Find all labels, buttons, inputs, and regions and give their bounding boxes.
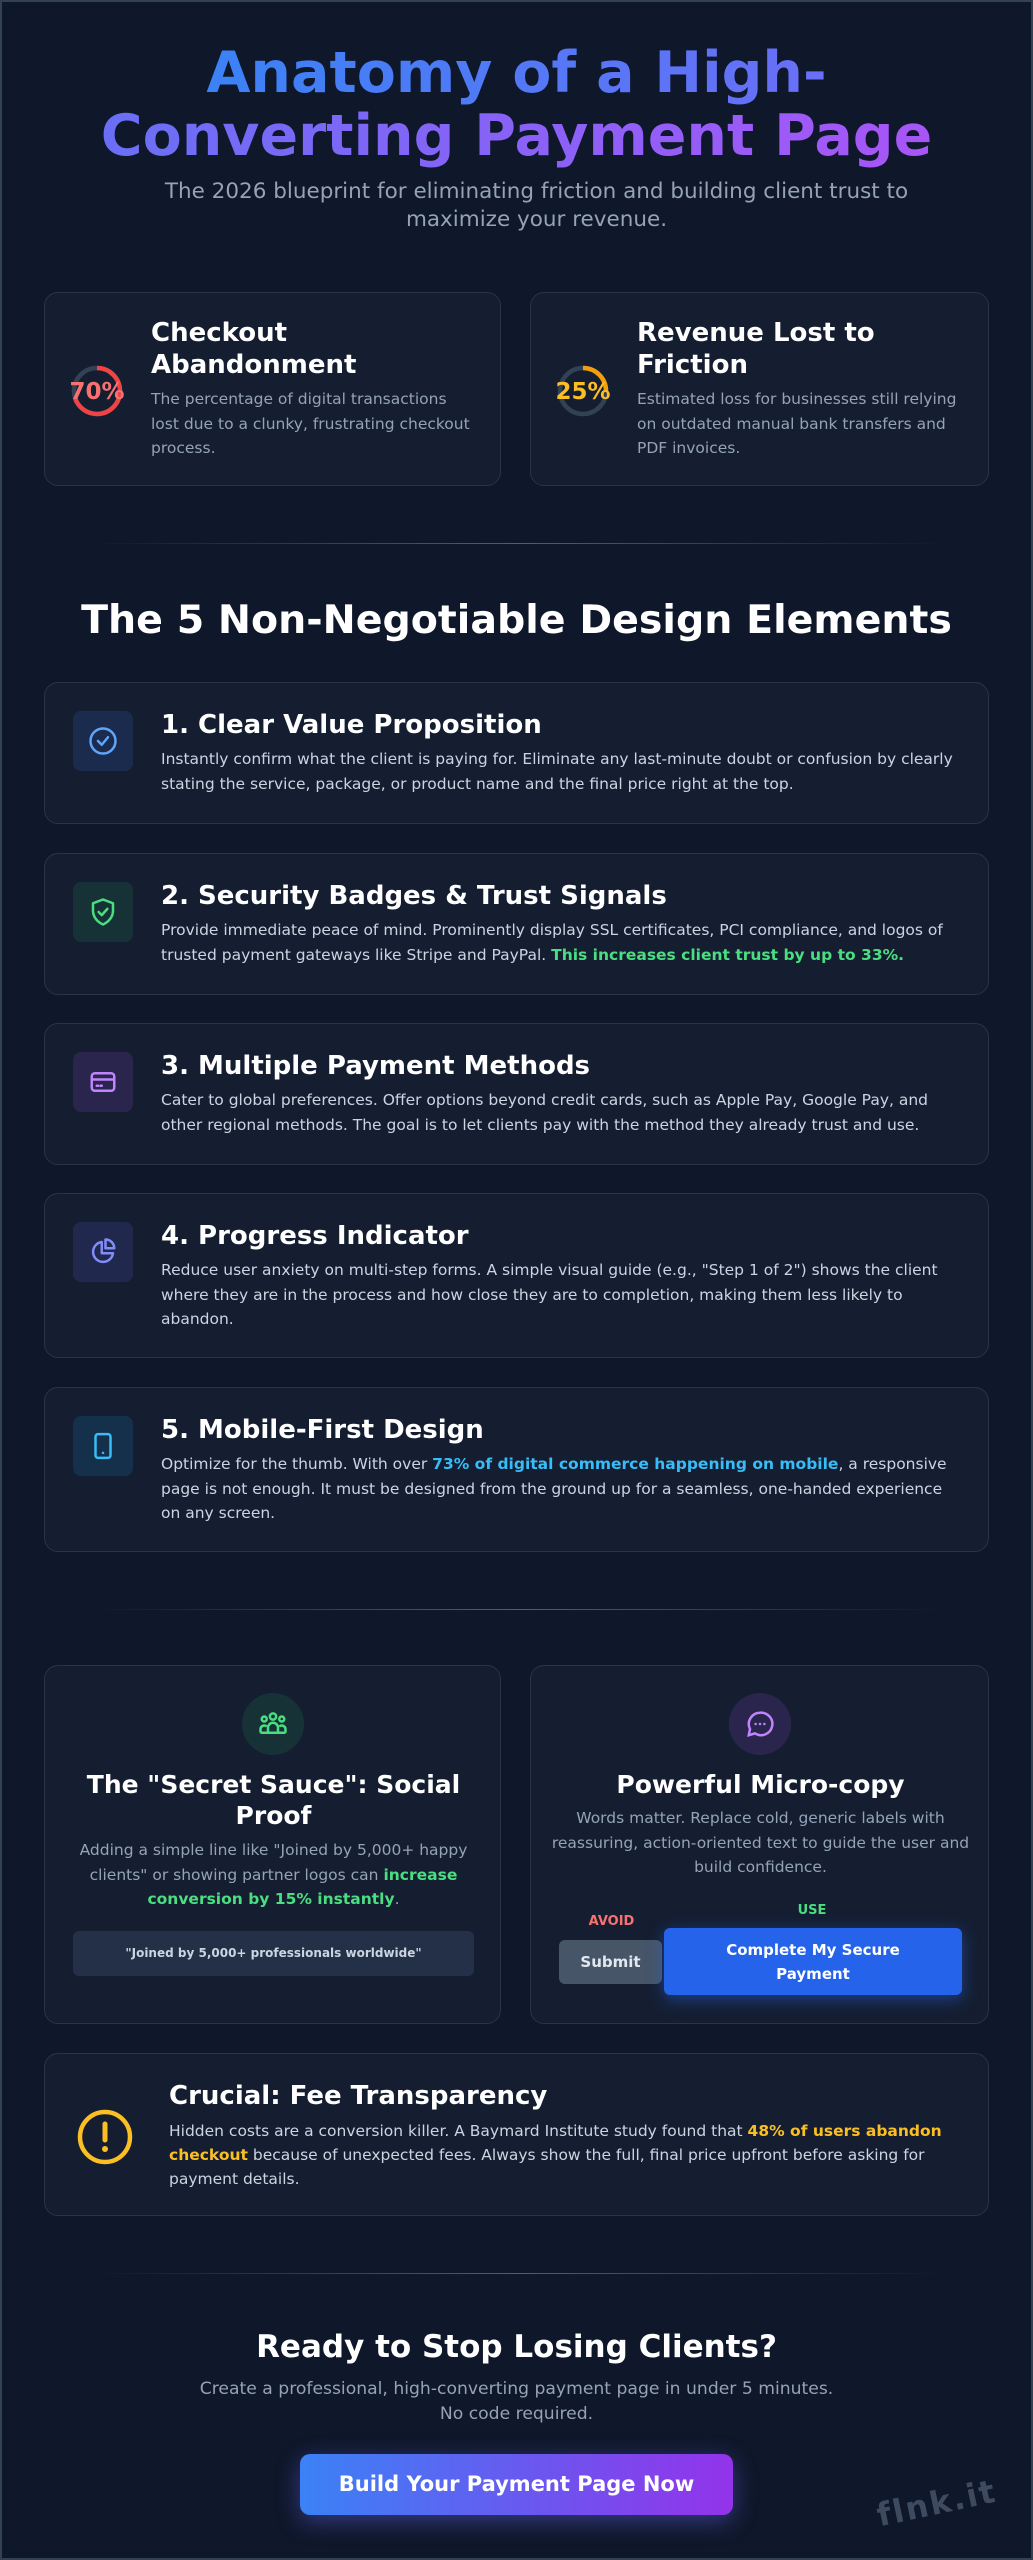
- title: Converting Payment Page: [101, 103, 932, 169]
- example badge: [73, 1931, 474, 1976]
- watermark: flnk.it: [873, 2472, 1000, 2534]
- icon: users: [242, 1693, 304, 1755]
- example badge: "Joined by 5,000+ professionals worldwide": [125, 1946, 422, 1960]
- element card 3: [44, 1023, 989, 1165]
- description: Provide immediate peace of mind. Prominently display SSL certificates, PCI compliance, and logos of trusted payment gateways like Stripe and PayPal. This increases client trust by up to 33%.: [161, 921, 943, 964]
- CTA button: [300, 2454, 733, 2515]
- stat description: [637, 390, 956, 457]
- stat title: Revenue Lost to Friction: [637, 318, 875, 380]
- CTA subtext: [200, 2379, 833, 2424]
- ring chart 25%: [555, 366, 611, 416]
- submit button: Submit: [580, 1953, 641, 1971]
- description: Instantly confirm what the client is paying for. Eliminate any last-minute doubt or confusion by clearly stating the service, package, or product name and the final price right at the top.: [161, 750, 953, 792]
- icon: phone: [73, 1416, 133, 1476]
- ring chart 70%: 70%: [69, 379, 125, 405]
- CTA button: Build Your Payment Page Now: [339, 2472, 694, 2496]
- subtitle: The 2026 blueprint for eliminating friction and building client trust to: [165, 179, 908, 204]
- heading: 5. Mobile-First Design: [161, 1415, 484, 1445]
- panel: social proof: [44, 1665, 501, 2024]
- description: Hidden costs are a conversion killer. A Baymard Institute study found that 48% of users abandon checkout because of unexpected fees. Always show the full, final price upfront before asking for payment details.: [169, 2122, 942, 2188]
- stat card: revenue lost: [530, 292, 989, 486]
- icon: check circle: [73, 711, 133, 771]
- use label: USE: [798, 1903, 826, 1918]
- description: Optimize for the thumb. With over 73% of digital commerce happening on mobile, a responsive page is not enough. It must be designed from the ground up for a seamless, one-handed experience on any screen.: [161, 1455, 947, 1522]
- heading: 1. Clear Value Proposition: [161, 710, 542, 740]
- ring chart 25%: 25%: [555, 379, 611, 405]
- subtitle: maximize your revenue.: [406, 207, 667, 232]
- element card 2: [44, 853, 989, 995]
- element card 1: [44, 682, 989, 824]
- heading: The "Secret Sauce": Social Proof: [87, 1770, 460, 1830]
- icon: warning: [78, 2110, 132, 2164]
- ring chart 70%: [69, 366, 125, 416]
- description: Words matter. Replace cold, generic labels with reassuring, action-oriented text to guide the user and build confidence.: [552, 1809, 969, 1876]
- stat description: The percentage of digital transactions: [151, 390, 447, 408]
- stat description: Estimated loss for businesses still relying: [637, 390, 956, 408]
- icon: pie chart: [73, 1222, 133, 1282]
- CTA subtext: No code required.: [440, 2404, 593, 2424]
- panel: micro-copy: [530, 1665, 989, 2024]
- stat description: on outdated manual bank transfers and: [637, 414, 946, 432]
- subtitle: [164, 179, 908, 232]
- stat description: [150, 390, 470, 457]
- icon: chat bubble: [729, 1693, 791, 1755]
- heading: Crucial: Fee Transparency: [169, 2081, 547, 2111]
- panel: fee transparency: [44, 2053, 989, 2216]
- element card 4: [44, 1193, 989, 1358]
- section heading: The 5 Non-Negotiable Design Elements: [81, 597, 952, 643]
- heading: 4. Progress Indicator: [161, 1221, 469, 1251]
- description: Adding a simple line like "Joined by 5,000+ happy clients" or showing partner logos can increase conversion by 15% instantly.: [80, 1841, 467, 1908]
- stat description: lost due to a clunky, frustrating checkout: [151, 414, 470, 432]
- title: Anatomy of a High-: [206, 40, 827, 106]
- recommended button: Complete My Secure: [726, 1941, 900, 1959]
- recommended button: [664, 1928, 962, 1995]
- heading: 3. Multiple Payment Methods: [161, 1051, 590, 1081]
- description: Cater to global preferences. Offer options beyond credit cards, such as Apple Pay, Google Pay, and other regional methods. The goal is to let clients pay with the method they already trust and use.: [161, 1091, 928, 1134]
- stat title: Checkout Abandonment: [151, 318, 356, 380]
- icon: shield: [73, 882, 133, 942]
- title: [101, 40, 932, 169]
- stat description: PDF invoices.: [637, 439, 740, 457]
- recommended button: Payment: [776, 1965, 850, 1983]
- description: Reduce user anxiety on multi-step forms. A simple visual guide (e.g., "Step 1 of 2") shows the client where they are in the process and how close they are to completion, making them less likely to abandon.: [161, 1261, 938, 1328]
- element card 5: [44, 1387, 989, 1552]
- icon: credit card: [73, 1052, 133, 1112]
- CTA subtext: Create a professional, high-converting payment page in under 5 minutes.: [200, 2379, 833, 2399]
- stat card: checkout abandonment: [44, 292, 501, 486]
- heading: 2. Security Badges & Trust Signals: [161, 881, 667, 911]
- CTA heading: Ready to Stop Losing Clients?: [256, 2329, 777, 2365]
- heading: Powerful Micro-copy: [616, 1770, 905, 1799]
- submit button: [559, 1940, 662, 1984]
- stat description: process.: [151, 439, 216, 457]
- avoid label: AVOID: [589, 1914, 634, 1929]
